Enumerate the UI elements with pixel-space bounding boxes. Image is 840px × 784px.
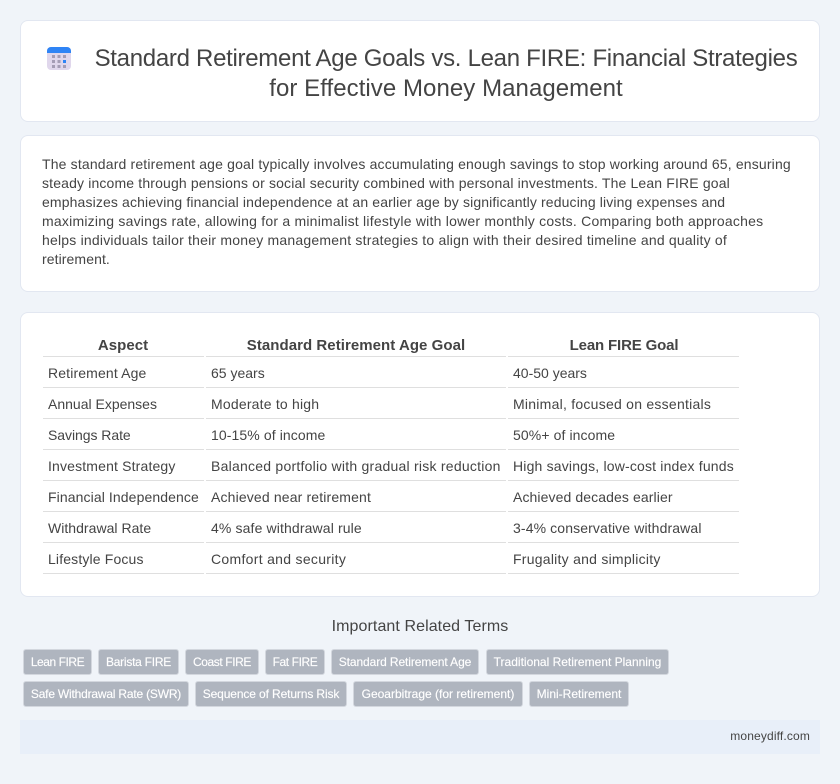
icon: calendar: [47, 47, 71, 70]
comparison table: [43, 337, 739, 574]
comparison table: Standard Retirement Age Goal: [247, 337, 465, 354]
comparison table: Comfort and security: [211, 551, 346, 567]
summary paragraph: [42, 156, 791, 267]
comparison table: Retirement Age: [48, 365, 146, 381]
comparison table: Withdrawal Rate: [48, 520, 151, 536]
related term tags: Coast FIRE: [193, 655, 251, 669]
comparison table: Savings Rate: [48, 427, 131, 443]
comparison table: 65 years: [211, 365, 265, 381]
title: for Effective Money Management: [269, 75, 623, 102]
summary paragraph: emphasizes achieving financial independence at an earlier age by significantly reducing living expenses and: [42, 194, 725, 210]
comparison table: Aspect: [98, 337, 148, 354]
comparison table: Minimal, focused on essentials: [513, 396, 711, 412]
summary paragraph: helps individuals tailor their money management strategies to align with their desired timeline and quality of: [42, 232, 727, 248]
panel: comparison table: [20, 312, 820, 597]
comparison table: 50%+ of income: [513, 427, 615, 443]
related term tags: Mini-Retirement: [537, 687, 621, 701]
footer bar: [20, 720, 820, 754]
comparison table: Achieved decades earlier: [513, 489, 673, 505]
comparison table: Investment Strategy: [48, 458, 176, 474]
comparison table: High savings, low-cost index funds: [513, 458, 734, 474]
comparison table: Lean FIRE Goal: [570, 337, 678, 354]
comparison table: Balanced portfolio with gradual risk reduction: [211, 458, 501, 474]
related term tags: Sequence of Returns Risk: [203, 687, 339, 701]
related term tags: [23, 649, 669, 707]
panel: header: [20, 20, 820, 122]
comparison table: 4% safe withdrawal rule: [211, 520, 362, 536]
related term tags: Geoarbitrage (for retirement): [362, 687, 514, 701]
comparison table: Achieved near retirement: [211, 489, 371, 505]
panel: summary text: [20, 135, 820, 292]
related term tags: Traditional Retirement Planning: [494, 655, 661, 669]
comparison table: Financial Independence: [48, 489, 199, 505]
comparison table: 40-50 years: [513, 365, 587, 381]
comparison table: Moderate to high: [211, 396, 319, 412]
comparison table: Lifestyle Focus: [48, 551, 144, 567]
related term tags: Standard Retirement Age: [339, 655, 471, 669]
related term tags: Fat FIRE: [273, 655, 317, 669]
comparison table: Frugality and simplicity: [513, 551, 661, 567]
comparison table: 10-15% of income: [211, 427, 325, 443]
summary paragraph: steady income through pensions or social security combined with personal investments. The Lean FIRE goal: [42, 175, 730, 191]
heading: related terms: Important Related Terms: [332, 618, 508, 635]
title: [95, 45, 797, 102]
related term tags: Lean FIRE: [31, 655, 84, 669]
footer source: moneydiff.com: [730, 729, 810, 743]
title: Standard Retirement Age Goals vs. Lean FIRE: Financial Strategies: [95, 45, 797, 72]
comparison table: Annual Expenses: [48, 396, 157, 412]
comparison table: 3-4% conservative withdrawal: [513, 520, 702, 536]
summary paragraph: The standard retirement age goal typically involves accumulating enough savings to stop working around 65, ensuring: [42, 156, 791, 172]
related term tags: Barista FIRE: [106, 655, 171, 669]
related term tags: Safe Withdrawal Rate (SWR): [31, 687, 181, 701]
summary paragraph: retirement.: [42, 251, 110, 267]
summary paragraph: maximizing savings rate, allowing for a minimalist lifestyle with lower monthly costs. Comparing both approaches: [42, 213, 763, 229]
